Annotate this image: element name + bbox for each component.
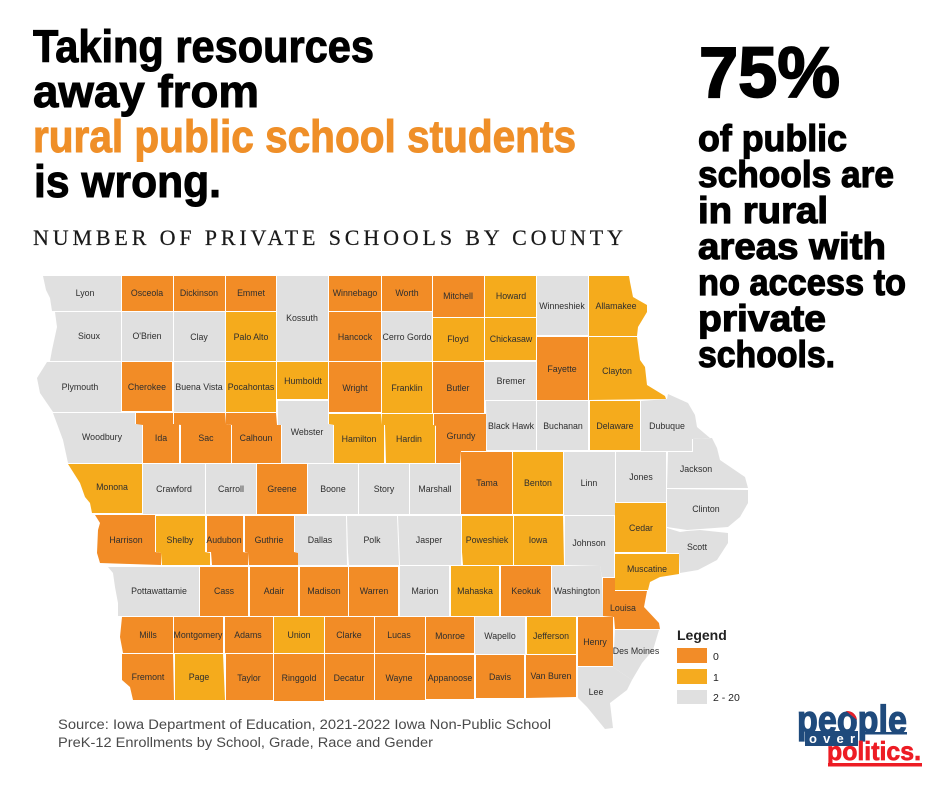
- county: Decatur: Decatur: [334, 673, 364, 683]
- county: Buena Vista: Buena Vista: [175, 382, 223, 392]
- county: Muscatine: [615, 554, 679, 590]
- county: Mitchell: [433, 276, 484, 317]
- county: Grundy: [434, 414, 486, 463]
- county: Grundy: Grundy: [447, 431, 476, 441]
- county: Sioux: [50, 312, 121, 361]
- county: Boone: Boone: [320, 484, 346, 494]
- map of Iowa counties: [37, 276, 748, 729]
- county: Pottawattamie: [108, 567, 199, 616]
- county: Poweshiek: Poweshiek: [466, 535, 509, 545]
- county: Carroll: Carroll: [218, 484, 244, 494]
- county: Wapello: [475, 617, 525, 654]
- county: Worth: Worth: [395, 288, 419, 298]
- county: Dallas: [295, 516, 347, 565]
- county: Calhoun: Calhoun: [240, 433, 272, 443]
- county: Davis: Davis: [489, 672, 512, 682]
- county: Dubuque: [641, 394, 710, 451]
- county: Kossuth: [277, 276, 328, 361]
- county: Howard: [485, 276, 536, 317]
- county: Winneshiek: [537, 276, 588, 335]
- county: Franklin: [382, 362, 432, 413]
- county: Des Moines: Des Moines: [613, 646, 660, 656]
- county: Linn: Linn: [581, 478, 597, 488]
- county: Pocahontas: Pocahontas: [228, 382, 275, 392]
- county: Cherokee: Cherokee: [128, 382, 166, 392]
- county: Washington: [552, 566, 603, 616]
- county: Delaware: [590, 401, 640, 450]
- county: Cass: Cass: [214, 586, 235, 596]
- county: Montgomery: Montgomery: [174, 630, 223, 640]
- county: Allamakee: [589, 276, 647, 336]
- county: Clay: [174, 312, 225, 361]
- county: Winneshiek: Winneshiek: [539, 301, 585, 311]
- county: Hardin: [382, 414, 435, 463]
- county: Woodbury: [53, 413, 142, 463]
- county: Sioux: Sioux: [78, 331, 101, 341]
- statistic description: no access to: [698, 262, 906, 303]
- county: Linn: [564, 452, 615, 515]
- county: Clarke: Clarke: [336, 630, 362, 640]
- county: Ida: [136, 413, 179, 463]
- county: Chickasaw: Chickasaw: [490, 334, 533, 344]
- county: Hancock: [329, 312, 381, 361]
- county: Muscatine: Muscatine: [627, 564, 667, 574]
- county: Humboldt: [277, 362, 328, 399]
- county: Jefferson: [527, 617, 576, 654]
- county: Davis: [476, 655, 524, 698]
- county: Taylor: Taylor: [237, 673, 261, 683]
- county: Osceola: Osceola: [131, 288, 163, 298]
- county: Audubon: [206, 516, 248, 565]
- county: Jasper: [398, 516, 461, 565]
- county: Louisa: [603, 578, 660, 629]
- county: Marion: Marion: [412, 586, 439, 596]
- county: Webster: Webster: [291, 427, 323, 437]
- county: Fremont: Fremont: [132, 672, 165, 682]
- logo: People Over Politics: people: [797, 699, 907, 742]
- county: Palo Alto: [226, 312, 276, 361]
- county: Warren: Warren: [360, 586, 388, 596]
- county: Tama: Tama: [476, 478, 498, 488]
- county: Winnebago: [329, 276, 381, 311]
- county: Scott: [667, 528, 728, 573]
- county: Wright: Wright: [342, 383, 368, 393]
- county: Clayton: [589, 337, 666, 400]
- county: Tama: [461, 452, 512, 514]
- title: away from: [33, 66, 259, 117]
- county: Greene: Greene: [267, 484, 297, 494]
- county: Worth: [382, 276, 432, 311]
- county: Harrison: [95, 515, 161, 565]
- county: Union: [274, 617, 324, 653]
- county: Union: Union: [288, 630, 311, 640]
- county: Clinton: Clinton: [692, 504, 720, 514]
- county: Keokuk: [501, 566, 551, 616]
- county: Cass: [200, 567, 248, 616]
- county: Cedar: Cedar: [629, 523, 653, 533]
- county: Franklin: Franklin: [391, 383, 423, 393]
- county: Clay: Clay: [190, 332, 208, 342]
- county: Madison: [300, 567, 348, 616]
- statistic: 75%: 75%: [699, 34, 840, 113]
- county: Cerro Gordo: Cerro Gordo: [383, 332, 432, 342]
- county: Allamakee: Allamakee: [595, 301, 637, 311]
- county: Monona: [68, 464, 142, 513]
- statistic description: schools are: [698, 154, 894, 195]
- county: Polk: [347, 516, 399, 565]
- legend: 2 - 20: [713, 692, 740, 704]
- statistic description: areas with: [698, 226, 886, 267]
- county: Crawford: [143, 464, 205, 514]
- county: Scott: Scott: [687, 542, 708, 552]
- county: Adair: Adair: [264, 586, 284, 596]
- county: Henry: Henry: [583, 637, 607, 647]
- county: Butler: [433, 362, 484, 413]
- county: Johnson: Johnson: [572, 538, 606, 548]
- county: Montgomery: [174, 617, 223, 653]
- county: Jackson: [667, 438, 748, 488]
- county: Ringgold: Ringgold: [282, 673, 316, 683]
- county: Woodbury: Woodbury: [82, 432, 123, 442]
- source note: [58, 717, 551, 750]
- county: Van Buren: Van Buren: [531, 671, 572, 681]
- county: Monroe: [426, 617, 474, 653]
- county: Poweshiek: [462, 516, 513, 565]
- county: Wayne: Wayne: [385, 673, 413, 683]
- county: Story: Story: [374, 484, 395, 494]
- county: Floyd: [433, 318, 484, 361]
- county: Mitchell: Mitchell: [443, 291, 473, 301]
- source note: PreK-12 Enrollments by School, Grade, Race and Gender: [58, 735, 434, 750]
- county: Greene: [257, 464, 307, 514]
- county: Monroe: Monroe: [435, 631, 465, 641]
- county: Dallas: Dallas: [308, 535, 333, 545]
- county: Crawford: Crawford: [156, 484, 192, 494]
- county: Appanoose: Appanoose: [428, 673, 472, 683]
- county: Story: [359, 464, 409, 514]
- county: Iowa: Iowa: [529, 535, 547, 545]
- county: Buchanan: Buchanan: [543, 421, 583, 431]
- county: Marshall: [410, 464, 460, 514]
- title: is wrong.: [34, 156, 221, 207]
- county: Butler: Butler: [447, 383, 470, 393]
- county: Clarke: [325, 617, 374, 653]
- statistic description: [698, 118, 906, 375]
- county: Appanoose: [426, 655, 474, 699]
- county: Shelby: [156, 516, 210, 565]
- county: Guthrie: Guthrie: [255, 535, 284, 545]
- county: Humboldt: Humboldt: [284, 376, 322, 386]
- county: Des Moines: [613, 630, 660, 680]
- county: Delaware: Delaware: [596, 421, 634, 431]
- county: Lyon: Lyon: [76, 288, 94, 298]
- county: Lucas: Lucas: [387, 630, 411, 640]
- county: Keokuk: Keokuk: [511, 586, 541, 596]
- county: Marion: [400, 566, 449, 616]
- county: Mahaska: [451, 566, 499, 616]
- county: Warren: [349, 567, 398, 616]
- county: Hamilton: [329, 414, 384, 463]
- county: Monona: Monona: [96, 482, 128, 492]
- county: Kossuth: Kossuth: [286, 313, 318, 323]
- county: Bremer: [485, 362, 536, 400]
- county: O'Brien: [122, 312, 173, 361]
- county: Carroll: [206, 464, 256, 514]
- county: Emmet: Emmet: [237, 288, 265, 298]
- county: Jefferson: Jefferson: [533, 631, 569, 641]
- county: Madison: Madison: [307, 586, 341, 596]
- county: Ringgold: [274, 654, 324, 701]
- county: Chickasaw: [485, 318, 536, 360]
- county: Black Hawk: Black Hawk: [488, 421, 535, 431]
- county: Clayton: Clayton: [602, 366, 632, 376]
- legend: 0: [713, 651, 719, 663]
- county: Pocahontas: [226, 362, 276, 412]
- county: Fremont: [122, 654, 174, 700]
- county: Polk: Polk: [363, 535, 381, 545]
- logo: People Over Politics: politics.: [827, 736, 921, 766]
- county: Lucas: [375, 617, 425, 653]
- county: Adams: [225, 617, 273, 653]
- county: Osceola: [122, 276, 173, 311]
- title: Taking resources: [33, 21, 374, 72]
- county: Clinton: [667, 489, 748, 530]
- county: Shelby: Shelby: [167, 535, 194, 545]
- county: Sac: Sac: [198, 433, 214, 443]
- county: Jones: [616, 452, 666, 502]
- county: Palo Alto: Palo Alto: [234, 332, 268, 342]
- subtitle: NUMBER OF PRIVATE SCHOOLS BY COUNTY: [33, 225, 623, 250]
- county: Calhoun: [226, 413, 281, 463]
- county: Cedar: [615, 503, 666, 552]
- county: Guthrie: [245, 516, 298, 565]
- county: Cerro Gordo: [382, 312, 432, 361]
- county: Howard: Howard: [496, 291, 526, 301]
- county: Adams: Adams: [234, 630, 262, 640]
- county: Page: [175, 654, 225, 700]
- county: Pottawattamie: Pottawattamie: [131, 586, 187, 596]
- county: Dickinson: Dickinson: [180, 288, 218, 298]
- county: Hamilton: Hamilton: [342, 434, 376, 444]
- county: Benton: [513, 452, 563, 514]
- title: [33, 21, 576, 207]
- county: Hancock: Hancock: [338, 332, 373, 342]
- county: Jasper: Jasper: [416, 535, 442, 545]
- county: Van Buren: [526, 655, 576, 698]
- county: Louisa: Louisa: [610, 603, 636, 613]
- county: Buchanan: [537, 401, 588, 450]
- county: Webster: [278, 401, 333, 463]
- legend: Legend: [677, 627, 727, 643]
- statistic description: of public: [698, 118, 847, 159]
- county: Ida: Ida: [155, 433, 167, 443]
- county: Wayne: [375, 654, 425, 700]
- county: Boone: [308, 464, 358, 514]
- county: Harrison: Harrison: [109, 535, 143, 545]
- county: Decatur: [325, 654, 374, 700]
- county: Dickinson: [174, 276, 225, 311]
- county: Buena Vista: [174, 362, 225, 412]
- statistic description: schools.: [698, 334, 835, 375]
- county: Iowa: [514, 516, 564, 565]
- county: Henry: [578, 617, 613, 666]
- county: Fayette: [537, 337, 588, 400]
- county: Jackson: Jackson: [680, 464, 712, 474]
- county: Fayette: Fayette: [547, 364, 577, 374]
- county: Emmet: [226, 276, 276, 311]
- county: Washington: Washington: [554, 586, 600, 596]
- county: Lee: [578, 667, 632, 729]
- statistic description: private: [698, 298, 826, 339]
- logo: People Over Politics: over: [809, 731, 855, 746]
- county: Adair: [250, 567, 298, 616]
- county: Mills: Mills: [139, 630, 157, 640]
- county: Dubuque: Dubuque: [649, 421, 685, 431]
- county: Bremer: Bremer: [497, 376, 525, 386]
- county: O'Brien: O'Brien: [132, 331, 162, 341]
- county: Page: Page: [189, 672, 209, 682]
- logo: People Over Politics: [797, 699, 922, 766]
- legend: 1: [713, 672, 719, 684]
- county: Wapello: Wapello: [484, 631, 516, 641]
- legend: [677, 627, 740, 704]
- county: Black Hawk: [486, 401, 536, 450]
- county: Lyon: [43, 276, 121, 311]
- statistic description: in rural: [698, 190, 828, 231]
- county: Hardin: Hardin: [396, 434, 422, 444]
- county: Benton: Benton: [524, 478, 552, 488]
- county: Lee: Lee: [589, 687, 603, 697]
- county: Mills: [120, 617, 173, 653]
- county: Jones: Jones: [629, 472, 653, 482]
- title: rural public school students: [33, 111, 576, 162]
- county: Cherokee: [122, 362, 172, 411]
- county: Winnebago: Winnebago: [333, 288, 377, 298]
- county: Audubon: Audubon: [206, 535, 242, 545]
- county: Marshall: Marshall: [418, 484, 452, 494]
- county: Mahaska: Mahaska: [457, 586, 493, 596]
- county: Wright: [329, 362, 381, 412]
- county: Plymouth: [37, 362, 121, 412]
- source note: Source: Iowa Department of Education, 2021-2022 Iowa Non-Public School: [58, 717, 551, 732]
- county: Taylor: [226, 654, 273, 700]
- county: Floyd: Floyd: [447, 334, 469, 344]
- county: Sac: [174, 413, 231, 463]
- county: Johnson: [565, 516, 614, 577]
- county: Plymouth: Plymouth: [62, 382, 98, 392]
